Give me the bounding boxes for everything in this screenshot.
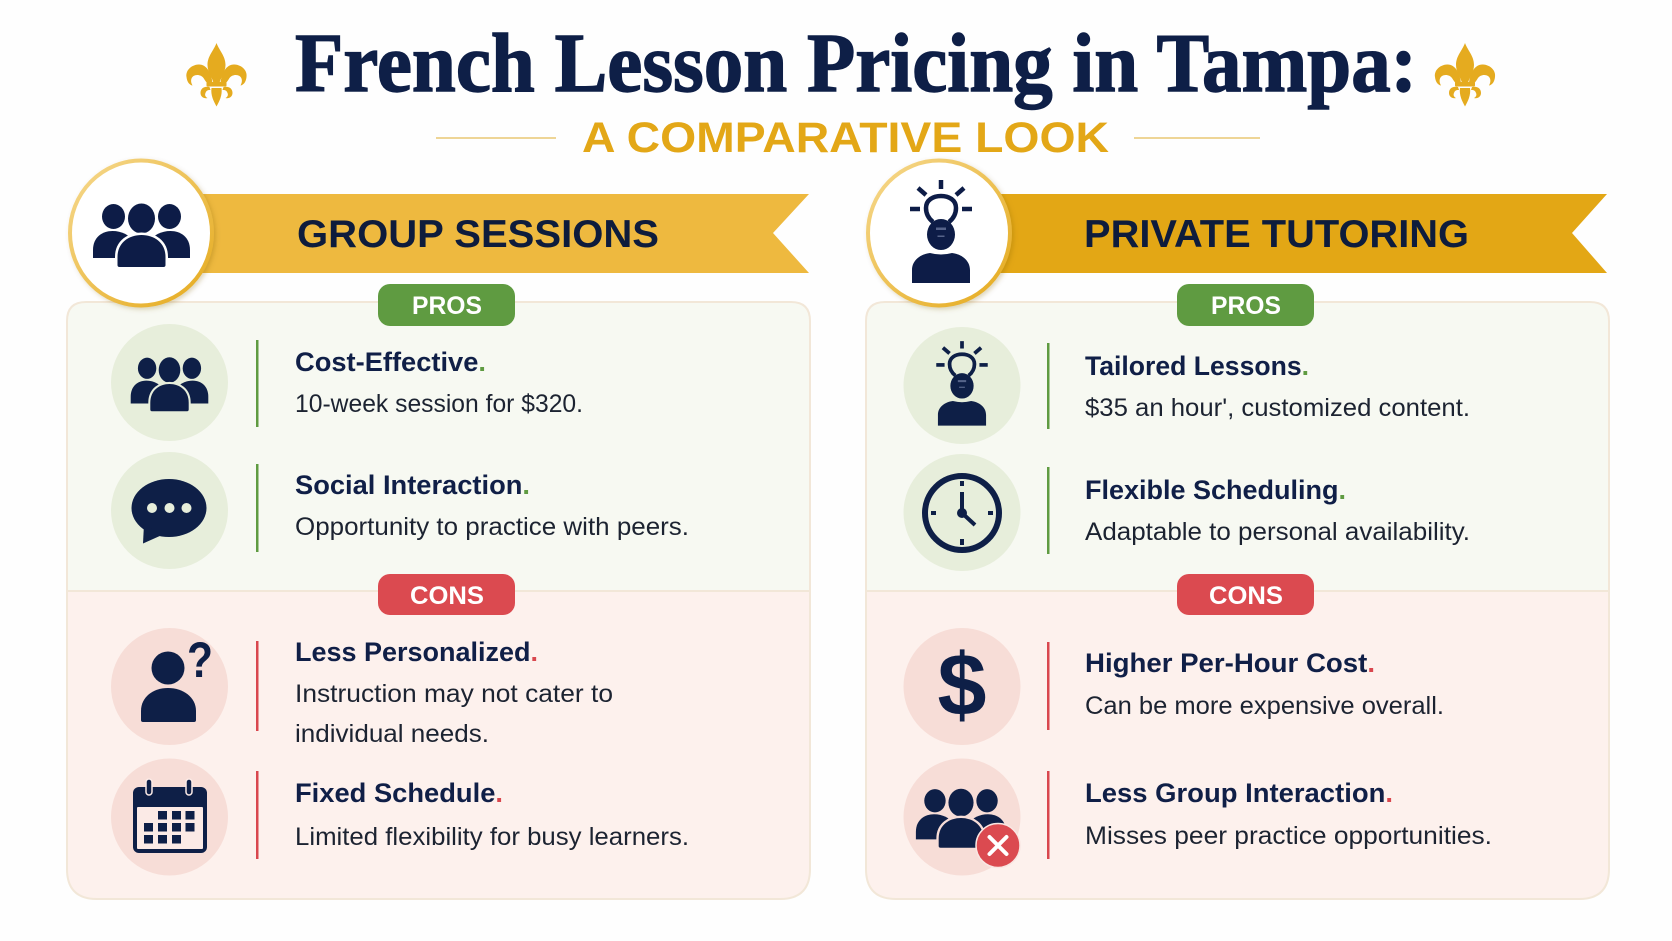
pros background [866,302,1609,591]
item: flexible scheduling: Flexible Scheduling. [1085,475,1346,505]
icon: person with question mark [111,628,228,745]
pros badge: PROS [1211,292,1281,320]
icon: calendar [111,758,228,876]
pros background [67,302,810,591]
cons badge: CONS [410,582,484,610]
title: French Lesson Pricing in Tampa: [295,17,1417,110]
item: social interaction: Opportunity to practice with peers. [295,513,689,541]
cons background [67,591,810,899]
item: social interaction [111,452,689,569]
item: fixed schedule: Limited flexibility for busy learners. [295,823,689,851]
icon: dollar sign [904,628,1020,745]
item: less personalized: individual needs. [295,720,489,748]
panel: private tutoring [866,160,1609,899]
pros badge [1177,284,1314,326]
icon: chat bubble [111,452,228,569]
cons badge [1177,574,1314,615]
subtitle: A COMPARATIVE LOOK [582,114,1109,162]
ribbon: private tutoring: PRIVATE TUTORING [1084,213,1469,256]
item: higher per-hour cost: Higher Per-Hour Cost. [1085,648,1375,678]
cons badge [378,574,515,615]
item: less group interaction: Less Group Interaction. [1085,778,1393,808]
item: tailored lessons: $35 an hour', customized content. [1085,394,1470,422]
ribbon: private tutoring [990,194,1607,273]
icon: person with question mark: ? [187,632,213,688]
cons badge: CONS [1209,582,1283,610]
icon: lightbulb person [904,327,1020,444]
item: less personalized: Less Personalized. [295,637,538,667]
item: higher per-hour cost [904,628,1444,745]
item: fixed schedule: Fixed Schedule. [295,778,503,808]
icon: group with red x [904,758,1020,876]
icon: dollar sign: $ [938,635,986,734]
pros badge: PROS [412,292,482,320]
pros badge [378,284,515,326]
icon: fleur-de-lis right [1435,43,1495,106]
medallion: group icon [70,160,212,306]
ribbon: group sessions [190,194,809,273]
item: tailored lessons: Tailored Lessons. [1085,351,1309,381]
medallion: lightbulb person icon [868,160,1010,306]
panel: group sessions [67,160,810,899]
ribbon: group sessions: GROUP SESSIONS [297,213,659,256]
cons background [866,591,1609,899]
item: less personalized: Instruction may not cater to [295,680,613,708]
icon: fleur-de-lis left [186,43,247,106]
item: less group interaction [904,758,1492,876]
item: cost-effective: 10-week session for $320. [295,390,583,418]
item: flexible scheduling: Adaptable to personal availability. [1085,518,1470,546]
icon: clock [904,454,1020,571]
item: fixed schedule [111,758,689,876]
item: social interaction: Social Interaction. [295,470,530,500]
item: cost-effective: Cost-Effective. [295,347,486,377]
item: cost-effective [111,324,583,441]
item: tailored lessons [904,327,1470,444]
item: higher per-hour cost: Can be more expensive overall. [1085,692,1444,720]
item: flexible scheduling [904,454,1470,571]
item: less group interaction: Misses peer practice opportunities. [1085,822,1492,850]
icon: group [111,324,228,441]
item: less personalized [111,628,613,748]
